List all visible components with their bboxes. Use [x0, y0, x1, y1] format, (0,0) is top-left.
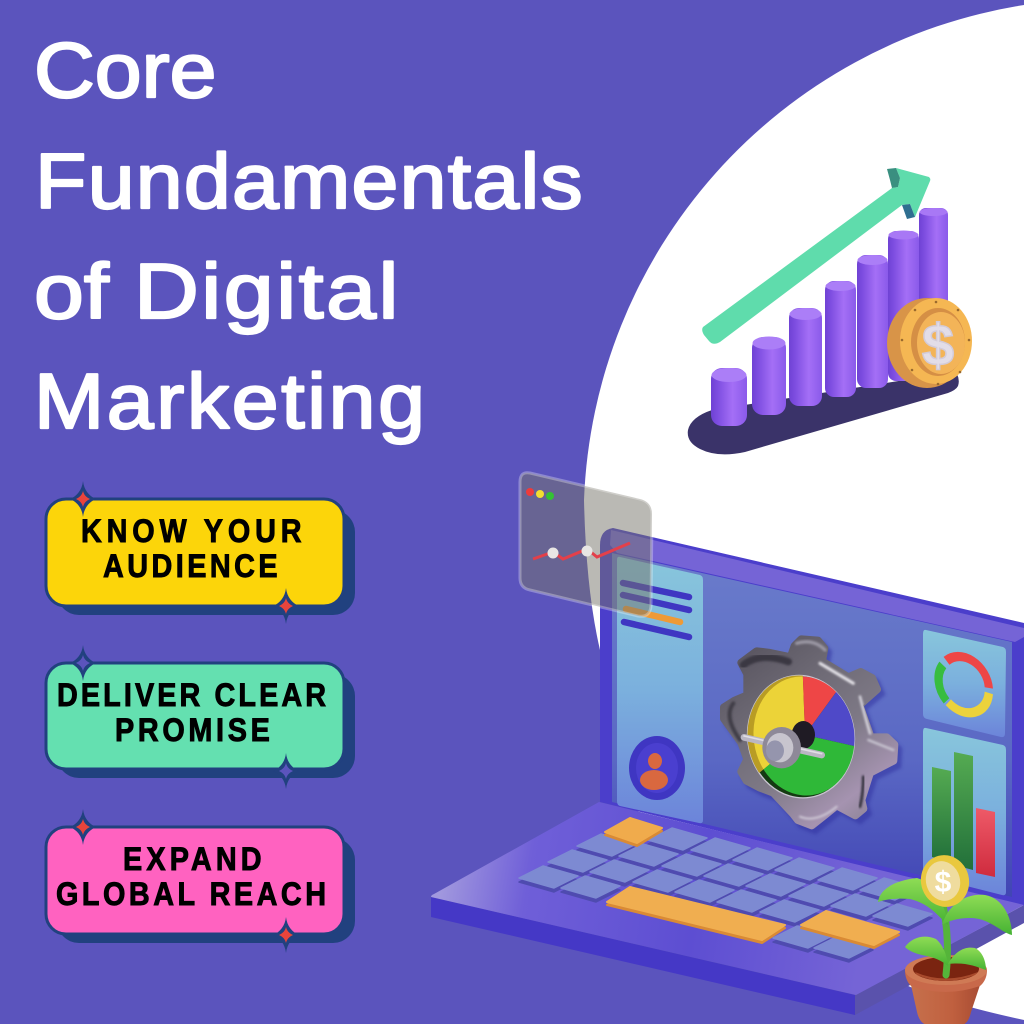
white circular backdrop	[584, 5, 1024, 1020]
button: know your audience	[46, 481, 355, 624]
window buttons	[526, 488, 554, 500]
screen top bevel	[610, 530, 1024, 642]
window line chart	[533, 543, 630, 559]
button: expand global reach	[46, 809, 355, 953]
bar chart panel	[923, 728, 1006, 895]
button: deliver clear promise	[46, 645, 355, 789]
gauge pie	[754, 676, 854, 796]
user avatar badge	[629, 736, 685, 800]
title: Digital	[134, 247, 398, 335]
laptop screen frame	[600, 528, 1024, 906]
keyboard deck	[431, 802, 1024, 1015]
gear gauge	[720, 639, 902, 835]
dollar coin	[887, 298, 972, 388]
leaves	[878, 878, 1012, 970]
plant stem	[943, 905, 947, 975]
title: of	[34, 247, 109, 335]
gear body	[724, 639, 894, 825]
button: know your audience: AUDIENCE	[103, 549, 278, 584]
laptop illustration	[431, 528, 1024, 1015]
title: Fundamentals	[35, 139, 583, 225]
donut chart	[939, 651, 989, 718]
button: know your audience: KNOW YOUR	[81, 514, 302, 549]
title	[34, 28, 583, 445]
button: expand global reach: GLOBAL REACH	[56, 877, 326, 912]
button: deliver clear promise: DELIVER CLEAR	[57, 678, 326, 713]
gear highlights	[730, 642, 893, 819]
sidebar menu lines	[623, 583, 689, 637]
dollar coin: $	[922, 313, 954, 378]
gauge recess	[746, 674, 856, 798]
plant coin: $	[935, 866, 952, 899]
chart base	[688, 373, 959, 454]
floating glass window	[520, 473, 652, 616]
button: expand global reach: EXPAND	[123, 842, 262, 877]
title: Marketing	[34, 359, 425, 445]
keyboard keys	[519, 818, 932, 962]
gauge lever	[744, 727, 822, 768]
gauge hub	[792, 721, 815, 749]
title: Core	[34, 28, 217, 114]
gear shadow	[724, 640, 902, 835]
donut chart panel	[923, 630, 1006, 737]
plant coin	[915, 850, 975, 912]
screen surface	[612, 553, 1012, 897]
growth chart illustration	[688, 168, 972, 454]
money plant	[878, 850, 1012, 1024]
button: deliver clear promise: PROMISE	[115, 713, 270, 748]
orange keys	[605, 818, 899, 948]
left sidebar panel	[617, 557, 703, 823]
plant pot	[905, 955, 987, 1024]
growth arrow	[702, 168, 930, 344]
chart bars	[711, 208, 948, 426]
